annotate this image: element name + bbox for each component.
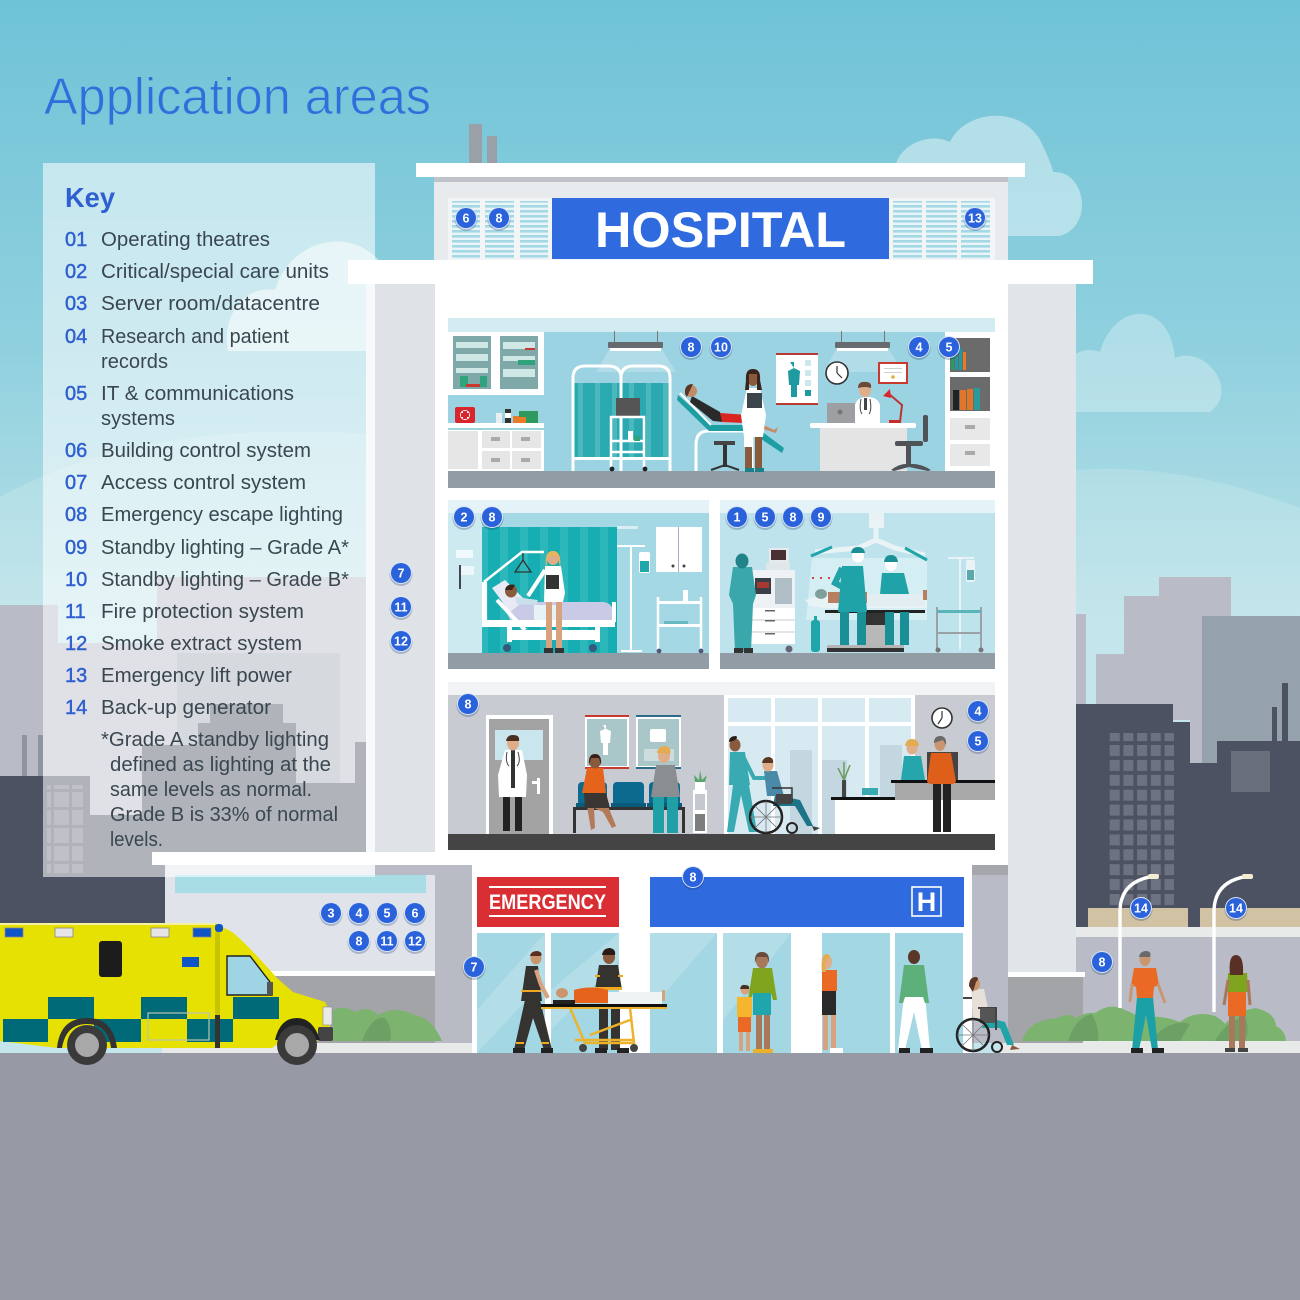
number badges: 14 — [1229, 902, 1243, 916]
key list: IT & communications — [101, 383, 294, 405]
anaesthesia cart and monitors — [751, 548, 795, 652]
man on street — [1130, 951, 1165, 1053]
room: critical care unit — [0, 68, 1286, 1065]
key list: 08 — [65, 504, 87, 526]
key list: Back-up generator — [101, 697, 271, 719]
bottles and boxes — [496, 409, 538, 423]
nurse — [528, 551, 565, 653]
number badges: 14 — [1134, 902, 1148, 916]
number badges: 7 — [398, 566, 405, 580]
posters — [585, 715, 681, 769]
doctor with x-ray — [741, 369, 766, 472]
key list: Access control system — [101, 472, 306, 494]
doctor at desk — [855, 382, 880, 423]
woman with child — [748, 952, 777, 1053]
key list: 10 — [65, 569, 87, 591]
door — [486, 715, 553, 834]
number badges: 11 — [380, 934, 394, 948]
side table with plant — [693, 770, 707, 833]
number badges — [320, 207, 1248, 980]
waiting bench — [573, 782, 685, 833]
cloud right — [1054, 314, 1221, 412]
key list: Operating theatres — [101, 229, 270, 251]
key list: 02 — [65, 261, 87, 283]
wall clock — [826, 362, 848, 384]
key footnote: *Grade A standby lighting — [101, 729, 329, 751]
wheelchair patient — [750, 757, 820, 833]
office chair — [891, 415, 931, 471]
entrance windows — [477, 933, 963, 1053]
roof slab — [416, 163, 1025, 177]
paramedic left — [513, 951, 553, 1053]
key list: 05 — [65, 383, 87, 405]
key list: Standby lighting – Grade A* — [101, 537, 349, 559]
side trolley — [657, 590, 703, 653]
building — [152, 124, 1093, 1053]
number badges: 6 — [463, 212, 470, 226]
key list: 03 — [65, 293, 87, 315]
counter with drawers — [448, 423, 544, 471]
nurse pushing wheelchair — [727, 736, 765, 832]
number badges: 8 — [489, 510, 496, 524]
wheelchair visitor — [957, 977, 1020, 1052]
street lamps — [1120, 876, 1250, 1012]
curtain — [482, 527, 617, 653]
number badges: 13 — [968, 212, 982, 226]
surgical light — [806, 513, 927, 620]
room: operating theatre — [720, 500, 995, 669]
number badges: 2 — [461, 510, 468, 524]
number badges: 4 — [975, 704, 982, 718]
key list: Fire protection system — [101, 601, 304, 623]
key list: 07 — [65, 472, 87, 494]
city skyline left — [0, 577, 366, 925]
top storey — [434, 177, 1008, 261]
key footnote: levels. — [110, 829, 163, 851]
emergency sign — [477, 877, 619, 927]
key list: 06 — [65, 440, 87, 462]
surgeon two — [880, 555, 909, 645]
doctor at door — [498, 735, 527, 831]
number badges: 3 — [328, 906, 335, 920]
roof vents — [469, 124, 497, 164]
desk and laptop — [810, 403, 916, 471]
number badges: 11 — [394, 600, 408, 614]
ground slab — [152, 852, 972, 865]
number badges: 5 — [762, 510, 769, 524]
key list: Smoke extract system — [101, 633, 302, 655]
main facade — [366, 284, 1076, 974]
ambulance wheels — [57, 1018, 320, 1065]
child — [737, 985, 752, 1051]
key heading: Key — [65, 182, 115, 213]
ambulance cab window — [227, 956, 272, 995]
receptionist — [901, 739, 925, 780]
key panel — [43, 163, 375, 877]
room: consulting room — [448, 318, 995, 488]
ambulance — [0, 923, 333, 1065]
surgeon one — [835, 547, 867, 645]
woman on street — [1224, 955, 1250, 1052]
clock — [932, 708, 952, 728]
ground floor facade — [472, 865, 972, 1053]
number badges: 12 — [408, 934, 422, 948]
emergency sign: EMERGENCY — [489, 891, 606, 914]
curtain rail — [617, 526, 638, 529]
road — [0, 1053, 1300, 1300]
desk lamp — [883, 389, 902, 423]
room: reception lobby — [448, 682, 995, 850]
iv stand — [617, 545, 650, 651]
street wall right — [1076, 927, 1300, 1043]
hospital bed with patient — [482, 552, 616, 652]
ceiling lights — [596, 331, 903, 372]
key footnote: defined as lighting at the — [110, 754, 331, 776]
left annex — [165, 865, 472, 1043]
key list — [65, 229, 349, 719]
key footnote: Grade B is 33% of normal — [110, 804, 338, 826]
key list: Critical/special care units — [101, 261, 329, 283]
number badges: 4 — [916, 340, 923, 354]
key list: Building control system — [101, 440, 311, 462]
trolley with laptop — [610, 398, 647, 471]
stretcher and patient — [541, 988, 667, 1052]
hospital sign — [552, 198, 889, 259]
rolling hills — [0, 431, 1300, 1060]
number badges: 5 — [384, 906, 391, 920]
key list: systems — [101, 408, 175, 430]
number badges: 4 — [356, 906, 363, 920]
nurse from behind — [729, 554, 756, 653]
number badges: 5 — [975, 734, 982, 748]
wall cupboard — [656, 527, 702, 572]
operating table and patient — [805, 577, 927, 652]
number badges: 8 — [496, 212, 503, 226]
iv stand and trolley — [936, 558, 984, 652]
number badges: 8 — [465, 698, 472, 712]
bushes right — [1022, 1007, 1286, 1041]
number badges: 8 — [1099, 956, 1106, 970]
ambulance side window — [99, 941, 122, 977]
key list: 04 — [65, 326, 87, 348]
filing shelves — [945, 332, 995, 471]
key list: 12 — [65, 633, 87, 655]
key list: Research and patient — [101, 326, 289, 348]
number badges: 8 — [690, 870, 697, 884]
number badges: 8 — [790, 510, 797, 524]
key list: Server room/datacentre — [101, 293, 320, 315]
key list: 09 — [65, 537, 87, 559]
right annex — [972, 865, 1085, 1043]
key list: 13 — [65, 665, 87, 687]
pavement — [162, 1041, 1300, 1053]
city skyline right — [1076, 577, 1300, 930]
lamp heads — [1148, 874, 1253, 879]
ambulance lights — [5, 924, 333, 1041]
number badges: 1 — [734, 510, 741, 524]
wall sockets — [456, 550, 474, 589]
cloud left — [227, 241, 430, 351]
seated man — [651, 746, 680, 833]
number badges: 9 — [818, 510, 825, 524]
examination chair with patient — [677, 384, 784, 471]
reception desk — [831, 762, 995, 834]
cloud top right — [895, 116, 1082, 236]
key footnote: same levels as normal. — [110, 779, 312, 801]
lobby window — [724, 695, 915, 835]
oxygen cylinder — [811, 616, 820, 652]
medicine cabinet — [448, 332, 544, 395]
paramedic right — [595, 948, 629, 1053]
number badges: 5 — [946, 340, 953, 354]
anatomy poster — [776, 353, 818, 405]
number badges: 8 — [688, 340, 695, 354]
key list: records — [101, 351, 168, 373]
key list: Standby lighting – Grade B* — [101, 569, 349, 591]
number badges: 7 — [471, 960, 478, 974]
woman walking — [822, 954, 843, 1053]
key list: 11 — [65, 601, 86, 623]
visitor at reception — [927, 736, 958, 832]
key list: 01 — [65, 229, 87, 251]
number badges: 12 — [394, 634, 408, 648]
bushes by ambulance — [333, 1008, 442, 1041]
number badges: 8 — [356, 934, 363, 948]
key footnote — [101, 729, 338, 851]
second slab — [348, 260, 1093, 284]
title: Application areas — [44, 68, 431, 126]
key list: Emergency lift power — [101, 665, 292, 687]
seated woman — [582, 754, 616, 830]
ambulance chequered stripe — [3, 997, 279, 1042]
key list: Emergency escape lighting — [101, 504, 343, 526]
certificate — [879, 363, 907, 383]
first aid kit — [455, 407, 475, 423]
blue entrance sign with H — [650, 877, 964, 927]
number badges: 6 — [412, 906, 419, 920]
number badges: 10 — [714, 340, 728, 354]
key list: 14 — [65, 697, 87, 719]
blue entrance sign with H: H — [917, 887, 936, 917]
hospital sign: HOSPITAL — [595, 202, 846, 258]
curtain screen — [572, 366, 670, 471]
man in green — [898, 950, 933, 1053]
